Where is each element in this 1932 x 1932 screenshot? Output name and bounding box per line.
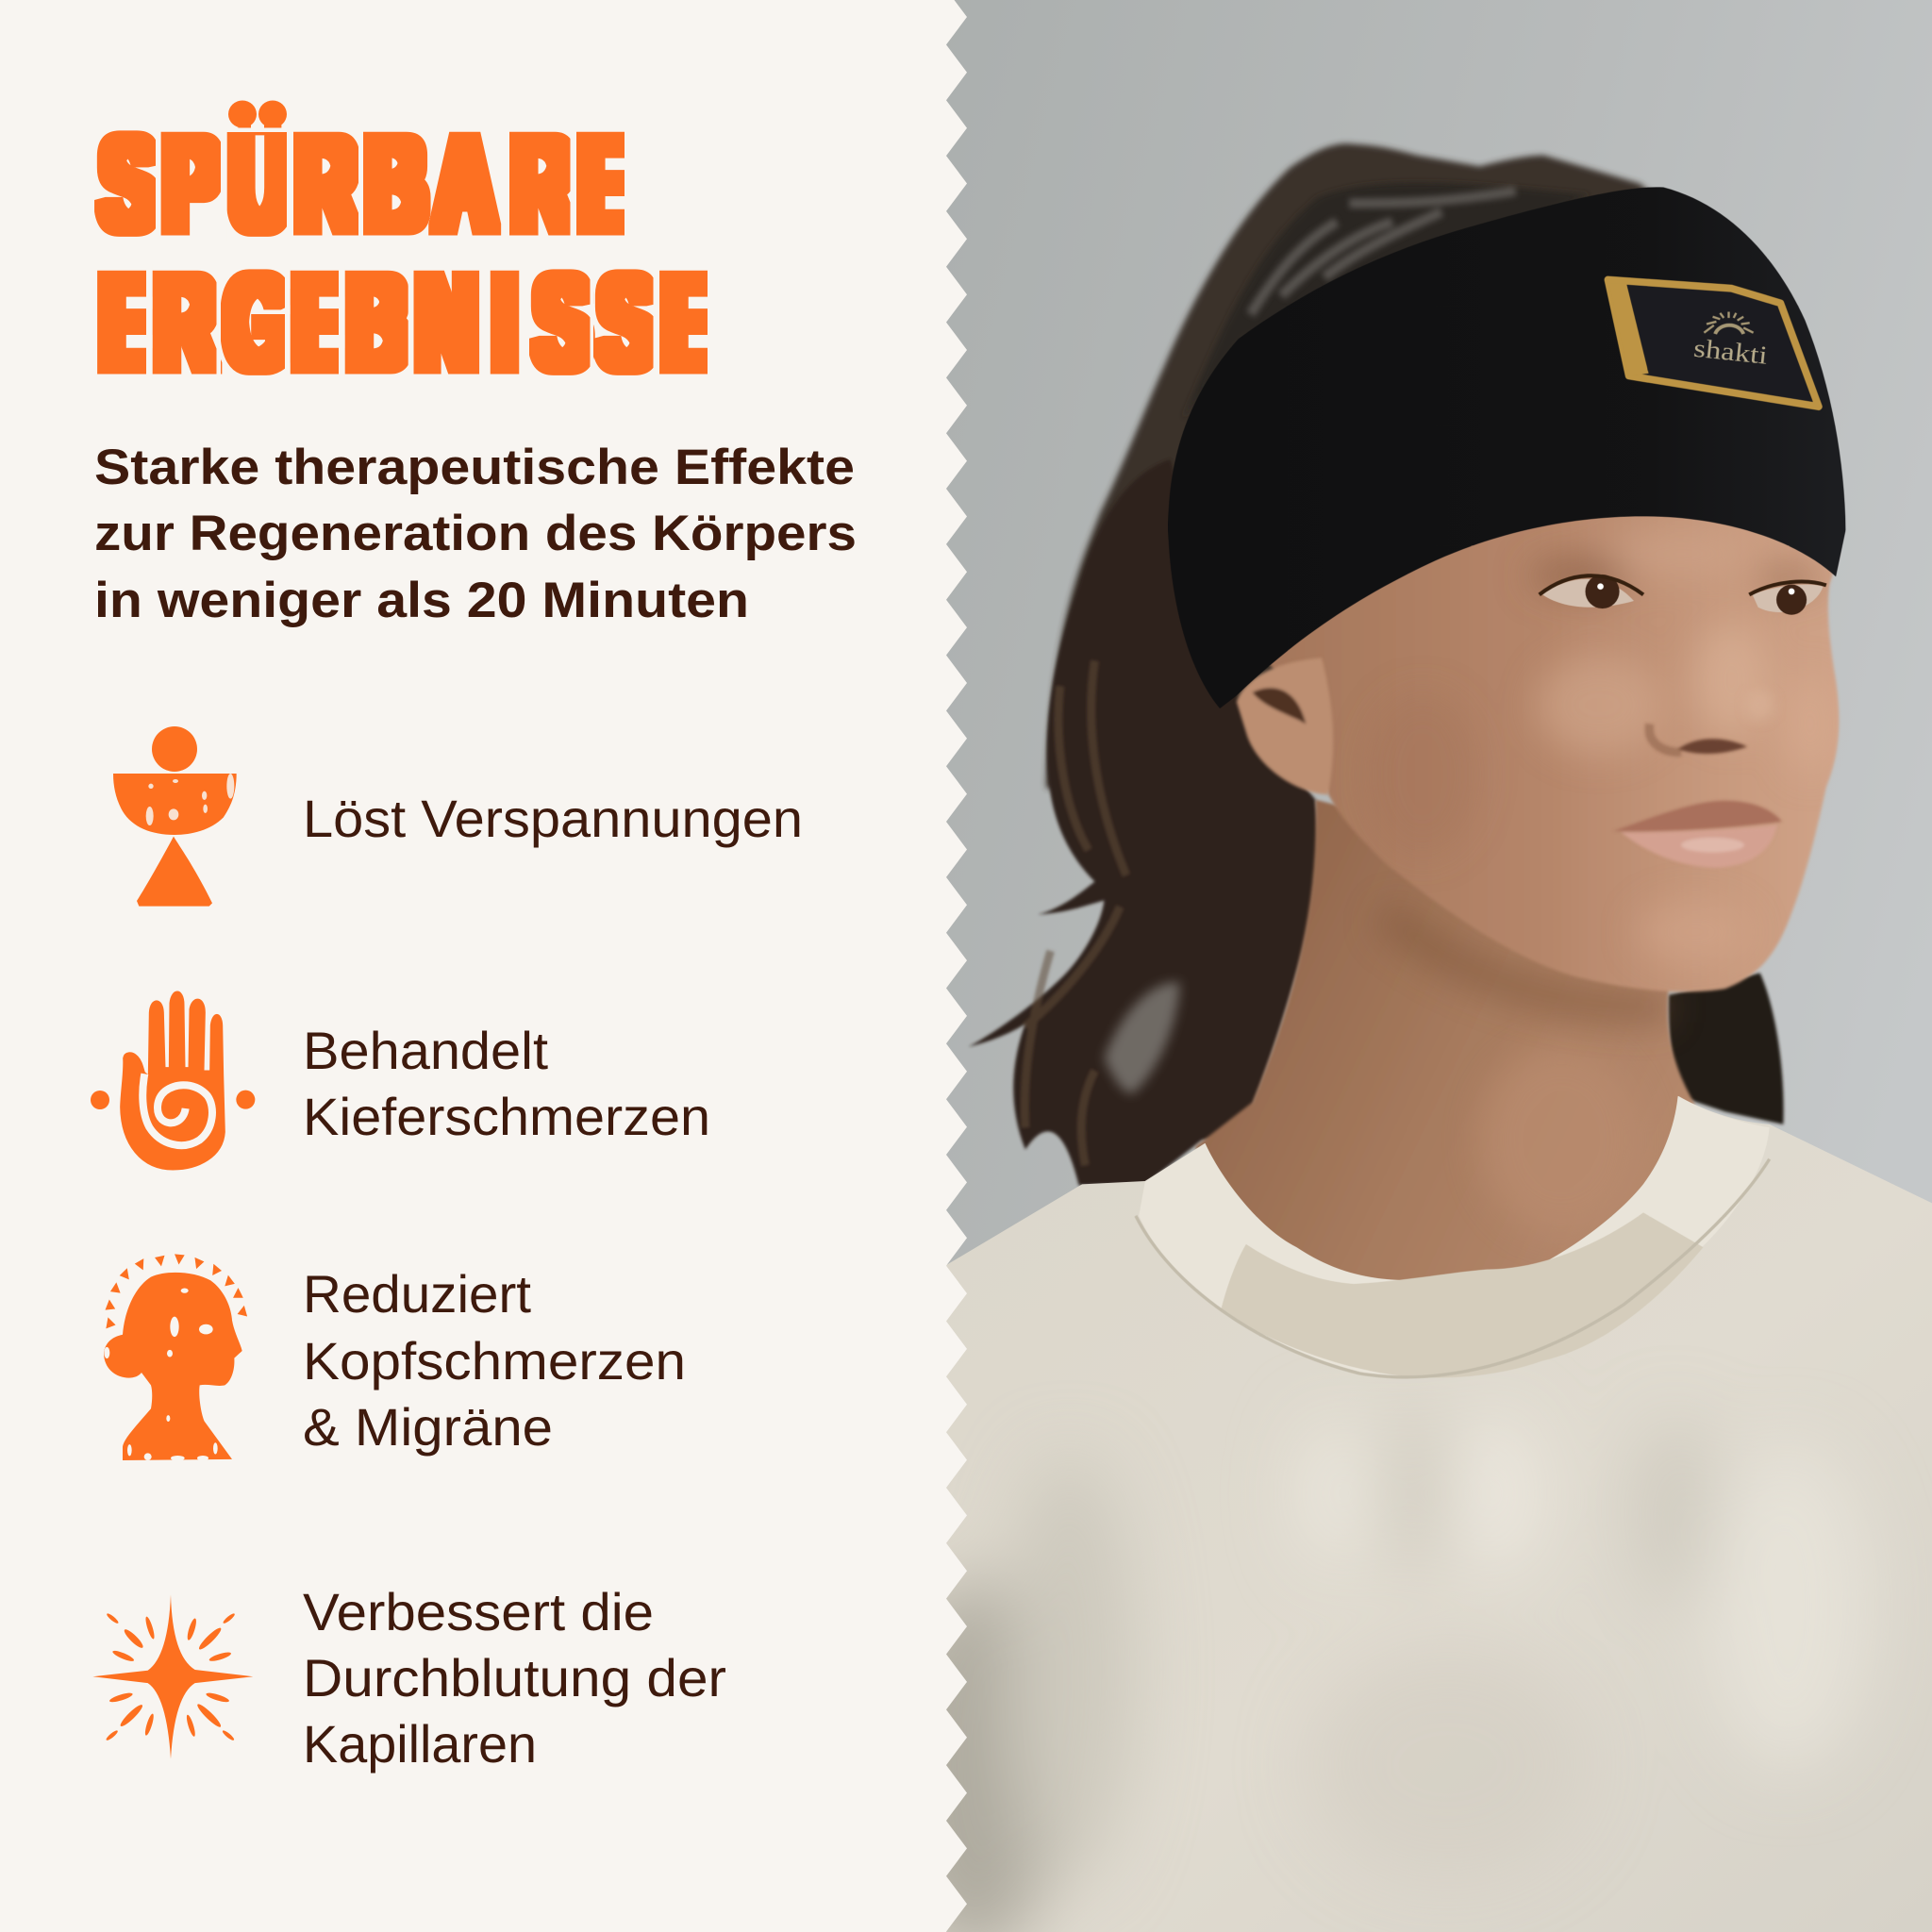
panel: cream left panel with zigzag edge	[0, 0, 967, 1932]
title: SPÜRBARE	[100, 109, 635, 259]
benefit: Reduziert Kopfschmerzen & Migräne: Kopfschmerzen	[303, 1331, 686, 1391]
benefit: Löst Verspannungen: Löst Verspannungen	[303, 789, 803, 848]
lower portrait: hair, neck, face, sweatshirt	[893, 459, 1932, 1932]
icon: four-point star with rays	[92, 1594, 253, 1758]
sweatshirt folds	[893, 1411, 1871, 1932]
benefit: Behandelt Kieferschmerzen: Behandelt	[303, 1021, 548, 1080]
icon: hand with spiral	[91, 991, 255, 1170]
title	[100, 94, 736, 398]
eye: right	[1749, 581, 1826, 615]
eye: left	[1540, 575, 1643, 608]
icon: head silhouette with halo	[104, 1254, 247, 1460]
sun mark	[1704, 311, 1754, 334]
benefit: Verbessert die Durchblutung der Kapillaren: Kapillaren	[303, 1714, 537, 1774]
photo: woman wearing black headband	[893, 0, 1932, 1932]
nose	[1649, 689, 1775, 754]
neck light and jaw shadow	[1479, 1045, 1643, 1235]
headband	[1168, 187, 1846, 708]
hair: behind neck	[1669, 973, 1784, 1124]
subtitle: Starke therapeutische Effekte	[94, 440, 855, 495]
hair: gap showing background	[1104, 982, 1180, 1093]
benefit: Verbessert die Durchblutung der Kapillaren: Verbessert die	[303, 1582, 654, 1641]
collar: upper band	[1139, 1096, 1770, 1377]
collar: stitching	[1136, 1159, 1770, 1377]
face	[1258, 497, 1839, 991]
face shading	[1531, 541, 1824, 947]
ear	[1237, 658, 1333, 794]
hair: crown and ponytail	[1046, 143, 1663, 789]
icon: chalice with sphere and triangle	[113, 726, 237, 907]
hair: left side	[969, 459, 1318, 1186]
subtitle: in weniger als 20 Minuten	[94, 573, 749, 628]
brand name: shakti	[1692, 334, 1770, 370]
subtitle: zur Regeneration des Körpers	[94, 506, 857, 561]
benefit: Verbessert die Durchblutung der Kapillaren	[303, 1582, 726, 1774]
label: shakti	[1607, 279, 1819, 407]
photo background	[934, 0, 1932, 1932]
benefit: Reduziert Kopfschmerzen & Migräne	[303, 1264, 686, 1457]
sweatshirt	[906, 1096, 1932, 1932]
title: ERGEBNISSE	[100, 248, 718, 398]
benefit: Behandelt Kieferschmerzen	[303, 1021, 710, 1146]
neck	[1195, 800, 1697, 1323]
collar: ribbing	[1221, 1212, 1703, 1377]
benefit: Reduziert Kopfschmerzen & Migräne: & Migräne	[303, 1397, 553, 1457]
benefit: Verbessert die Durchblutung der Kapillaren: Durchblutung der	[303, 1648, 726, 1707]
benefit: Behandelt Kieferschmerzen: Kieferschmerzen	[303, 1087, 710, 1146]
subtitle	[94, 440, 857, 628]
lips	[1613, 801, 1782, 868]
benefit: Reduziert Kopfschmerzen & Migräne: Reduziert	[303, 1264, 531, 1324]
